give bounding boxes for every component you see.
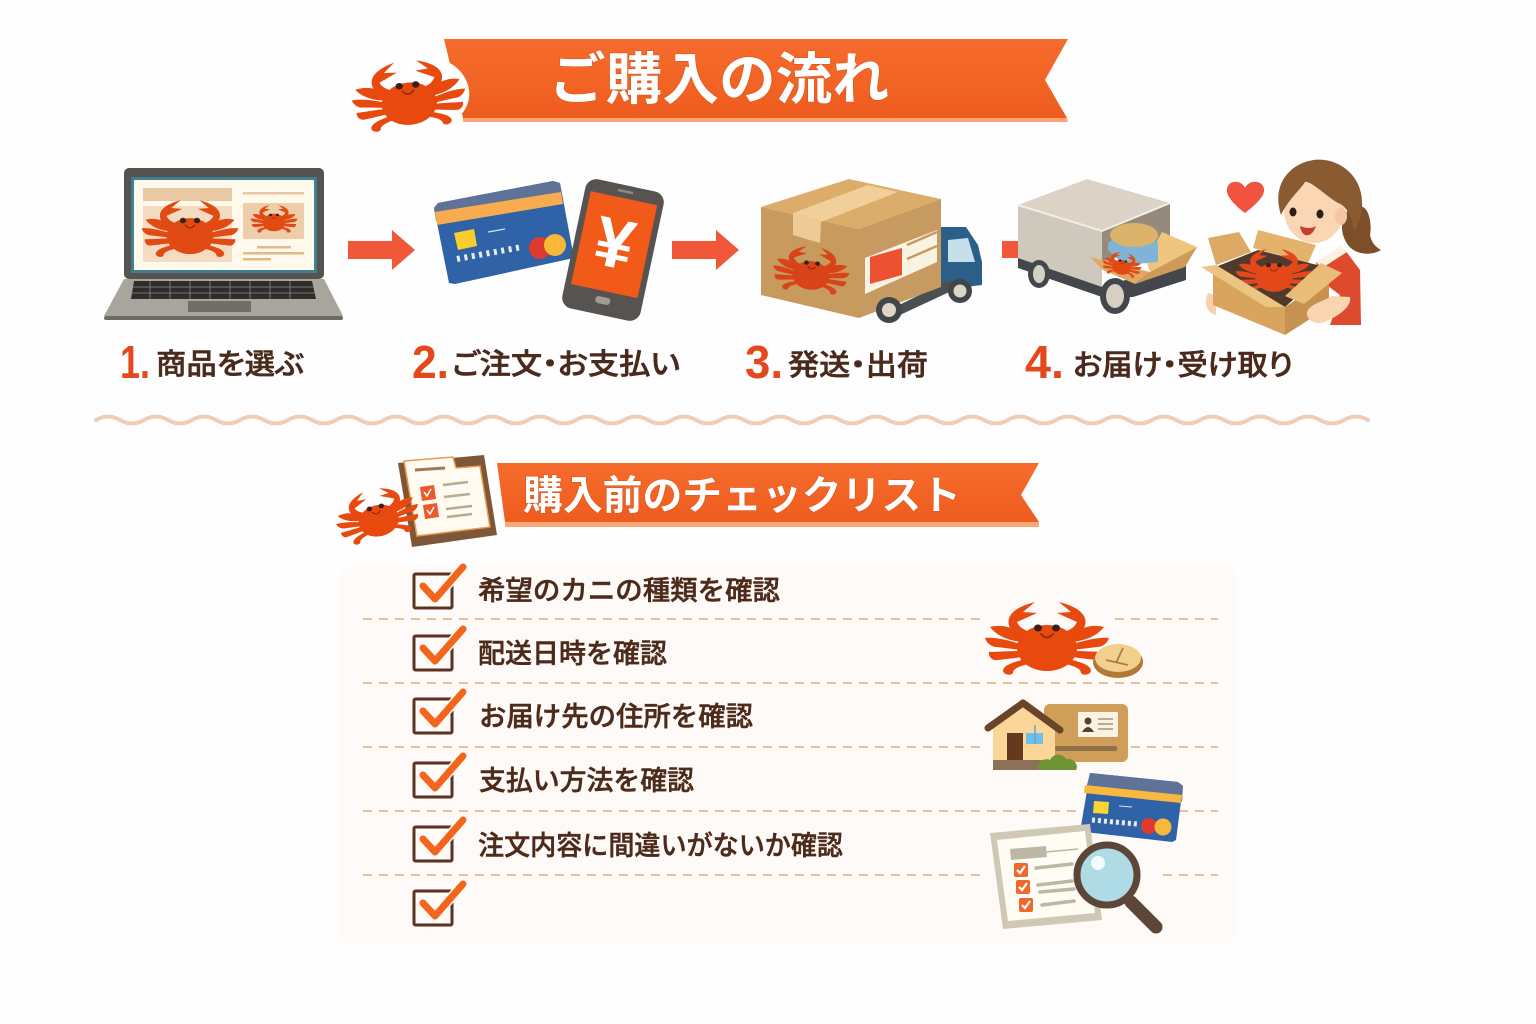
step 1: laptop xyxy=(104,168,343,320)
arrow 1 xyxy=(348,230,415,270)
wavy divider xyxy=(96,416,1368,424)
icon: clipboard with crab xyxy=(330,455,497,548)
icon: smartphone with yen xyxy=(560,177,666,323)
row 1: 希望のカニの種類を確認 xyxy=(478,569,780,608)
step 2 label: ご注文・お支払い xyxy=(452,341,680,383)
step 3: parcel truck xyxy=(761,179,982,323)
checklist banner xyxy=(497,463,1039,527)
title banner xyxy=(444,35,1068,122)
icon: crab mascot on title xyxy=(348,56,469,134)
icon: heart xyxy=(1227,182,1264,213)
step 3 label: 発送・出荷 xyxy=(788,342,928,384)
row 2: 配送日時を確認 xyxy=(478,632,667,671)
checklist title text: 購入前のチェックリスト xyxy=(523,463,961,521)
step 3 label xyxy=(745,336,928,388)
step 4 label: 4. xyxy=(1025,336,1064,388)
icon: crab with clock coin xyxy=(985,602,1143,678)
icon: smartphone with yen: ¥ xyxy=(587,201,642,285)
row 2 xyxy=(414,629,667,671)
icon: credit card small xyxy=(1081,773,1183,842)
panel: checklist xyxy=(340,565,1237,944)
step 2 label: 2. xyxy=(412,336,449,388)
parcel with helmet-like contents xyxy=(1090,223,1197,284)
step labels xyxy=(120,336,1293,388)
arrow 2 xyxy=(672,230,739,270)
title text: ご購入の流れ xyxy=(549,35,889,116)
icon: crab in box xyxy=(1236,249,1312,294)
row 5: 注文内容に間違いがないか確認 xyxy=(478,824,843,863)
arrow 3 stub xyxy=(1002,241,1018,258)
icon: document and magnifier xyxy=(985,824,1157,929)
step 4 label xyxy=(1025,336,1293,388)
row 6 checkbox xyxy=(414,884,463,925)
step 1 label: 商品を選ぶ xyxy=(156,341,305,383)
step 3 label: 3. xyxy=(745,336,783,388)
step 1 label: 1. xyxy=(120,336,150,388)
step 2: card and smartphone xyxy=(434,177,666,323)
row 4: 支払い方法を確認 xyxy=(479,759,694,798)
icon: house and address card xyxy=(980,703,1130,770)
step 4: delivery truck xyxy=(1018,179,1197,314)
step 4: woman receiving box xyxy=(1201,160,1381,335)
step 4 label: お届け・受け取り xyxy=(1073,342,1293,384)
row 3: お届け先の住所を確認 xyxy=(479,695,753,734)
step 1 label xyxy=(120,336,305,388)
icon: credit card xyxy=(434,181,574,284)
step 2 label xyxy=(412,336,680,388)
